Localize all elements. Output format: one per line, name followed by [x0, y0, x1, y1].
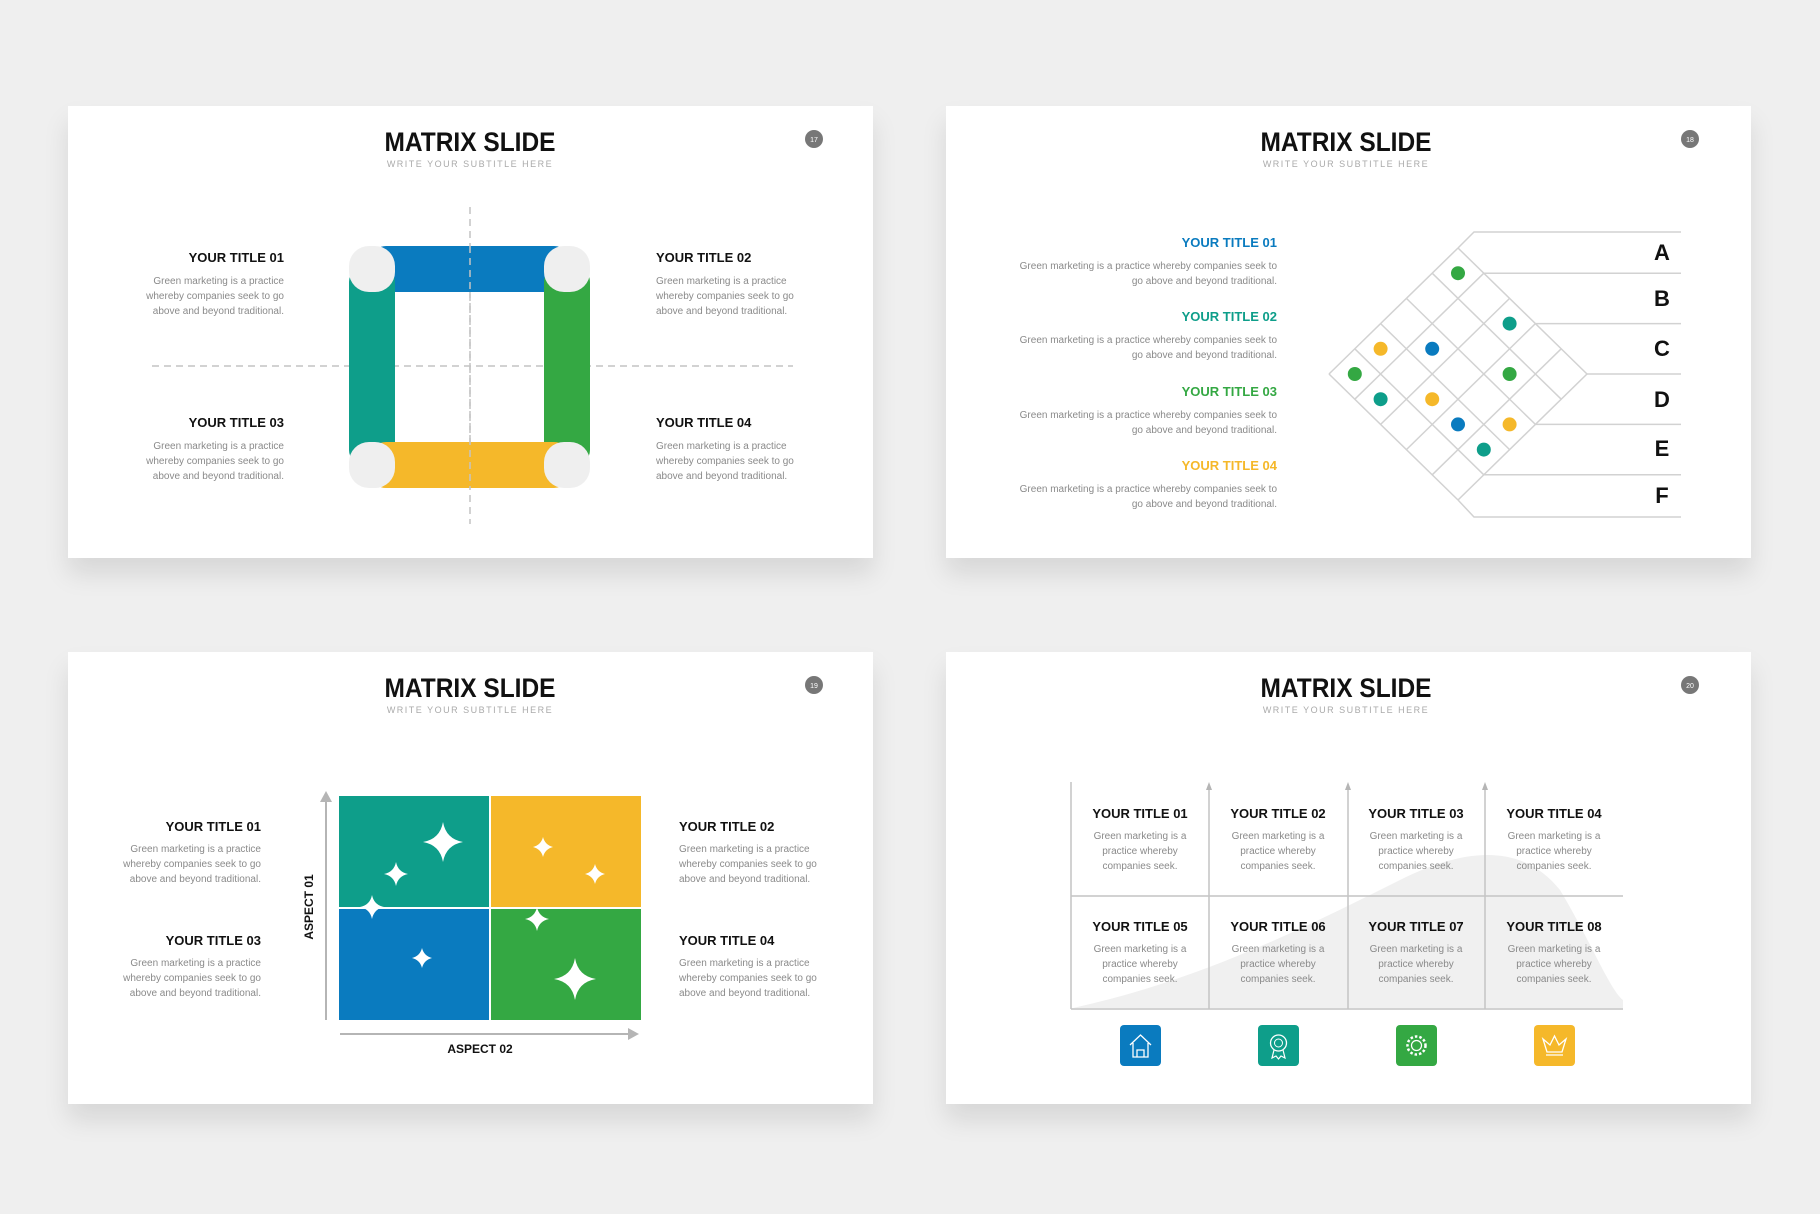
axis labels	[302, 874, 513, 1056]
title	[1260, 127, 1432, 169]
text: left titles: whereby companies seek to go	[122, 973, 261, 984]
cells text: practice whereby	[1378, 959, 1454, 970]
text: title 03: above and beyond traditional.	[153, 471, 284, 482]
text: title 02	[655, 250, 794, 317]
cells text: companies seek.	[1240, 974, 1316, 985]
text: left titles: YOUR TITLE 01	[166, 819, 261, 834]
axis labels: ASPECT 02	[447, 1042, 513, 1056]
text: right titles: above and beyond traditional.	[679, 988, 810, 999]
title	[384, 673, 556, 715]
panel: slide 17 square frame matrix	[68, 106, 873, 558]
text: title 01: whereby companies seek to go	[145, 291, 284, 302]
text: title 01: YOUR TITLE 01	[189, 250, 284, 265]
text list: Green marketing is a practice whereby companies seek to	[1020, 484, 1277, 495]
panel: slide 20 table matrix	[946, 652, 1751, 1104]
text: left titles: Green marketing is a practice	[130, 844, 261, 855]
text list: go above and beyond traditional.	[1132, 276, 1277, 287]
text: left titles	[122, 819, 261, 999]
title: WRITE YOUR SUBTITLE HERE	[1263, 159, 1429, 169]
title: MATRIX SLIDE	[1260, 127, 1432, 157]
text list: YOUR TITLE 04	[1182, 458, 1278, 473]
cells text: YOUR TITLE 04	[1506, 806, 1602, 821]
text list: Green marketing is a practice whereby companies seek to	[1020, 410, 1277, 421]
text: left titles: Green marketing is a practice	[130, 958, 261, 969]
text: title 03: YOUR TITLE 03	[189, 415, 284, 430]
text: title 03: whereby companies seek to go	[145, 456, 284, 467]
row labels A-F: A	[1654, 240, 1670, 265]
quadrants	[339, 796, 641, 1020]
panel: slide 18 diamond grid	[946, 106, 1751, 558]
cells text	[1092, 806, 1602, 985]
text list: go above and beyond traditional.	[1132, 499, 1277, 510]
text list: YOUR TITLE 01	[1182, 235, 1277, 250]
cells text: companies seek.	[1378, 974, 1454, 985]
title	[384, 127, 556, 169]
panel: slide 19 2x2 aspect matrix	[68, 652, 873, 1104]
text: title 01: above and beyond traditional.	[153, 306, 284, 317]
title: WRITE YOUR SUBTITLE HERE	[387, 159, 553, 169]
title: MATRIX SLIDE	[384, 673, 556, 703]
text: right titles: above and beyond traditional.	[679, 874, 810, 885]
text: title 04	[655, 415, 794, 482]
page number	[1681, 130, 1699, 148]
row labels A-F: E	[1655, 436, 1669, 461]
cells text: Green marketing is a	[1232, 831, 1325, 842]
cells text: practice whereby	[1102, 959, 1178, 970]
cells text: Green marketing is a	[1094, 831, 1187, 842]
cells text: Green marketing is a	[1232, 944, 1325, 955]
title	[1260, 673, 1432, 715]
cells text: YOUR TITLE 08	[1506, 919, 1602, 934]
cells text: practice whereby	[1102, 846, 1178, 857]
cells text: Green marketing is a	[1094, 944, 1187, 955]
text list: Green marketing is a practice whereby companies seek to	[1020, 335, 1277, 346]
square frame	[349, 246, 590, 488]
icon: medal	[1258, 1025, 1299, 1066]
page number: 19	[810, 683, 818, 690]
text list: YOUR TITLE 02	[1182, 309, 1277, 324]
icons: sparkles	[360, 822, 605, 1000]
cells text: YOUR TITLE 01	[1092, 806, 1188, 821]
cells text: Green marketing is a	[1508, 944, 1601, 955]
cells text: companies seek.	[1102, 861, 1178, 872]
text: right titles: whereby companies seek to go	[678, 859, 817, 870]
text list: go above and beyond traditional.	[1132, 350, 1277, 361]
page number: 20	[1686, 683, 1694, 690]
text: left titles: above and beyond traditional.	[130, 988, 261, 999]
text: title 04: above and beyond traditional.	[656, 471, 787, 482]
grid lines and arrows	[1071, 782, 1623, 1009]
text: title 03: Green marketing is a practice	[153, 441, 284, 452]
icon: house	[1120, 1025, 1161, 1066]
cells text: practice whereby	[1378, 846, 1454, 857]
text: title 01	[145, 250, 284, 317]
axis labels: ASPECT 01	[302, 874, 316, 940]
text: title 03	[145, 415, 284, 482]
text: title 02: whereby companies seek to go	[655, 291, 794, 302]
text: title 04: whereby companies seek to go	[655, 456, 794, 467]
row labels A-F: C	[1654, 336, 1670, 361]
page number	[1681, 676, 1699, 694]
page number: 17	[810, 137, 818, 144]
page number: 18	[1686, 137, 1694, 144]
text: right titles	[678, 819, 817, 999]
dashed axes	[152, 207, 793, 524]
text: title 04: YOUR TITLE 04	[656, 415, 752, 430]
background curve	[1073, 855, 1623, 1008]
text list	[1020, 235, 1278, 510]
title: WRITE YOUR SUBTITLE HERE	[1263, 705, 1429, 715]
cells text: practice whereby	[1240, 959, 1316, 970]
cells text: YOUR TITLE 03	[1368, 806, 1464, 821]
page number	[805, 676, 823, 694]
icon: gear	[1396, 1025, 1437, 1066]
text list: YOUR TITLE 03	[1182, 384, 1277, 399]
cells text: companies seek.	[1378, 861, 1454, 872]
cells text: companies seek.	[1516, 974, 1592, 985]
cells text: YOUR TITLE 02	[1230, 806, 1326, 821]
text: right titles: YOUR TITLE 04	[679, 933, 775, 948]
cells text: YOUR TITLE 06	[1230, 919, 1326, 934]
row labels A-F: D	[1654, 387, 1670, 412]
cells text: companies seek.	[1102, 974, 1178, 985]
text: title 04: Green marketing is a practice	[656, 441, 787, 452]
cells text: Green marketing is a	[1370, 831, 1463, 842]
title: MATRIX SLIDE	[384, 127, 556, 157]
text: right titles: Green marketing is a practice	[679, 958, 810, 969]
text: right titles: YOUR TITLE 02	[679, 819, 774, 834]
diamond grid chart	[1329, 232, 1681, 517]
cells text: companies seek.	[1516, 861, 1592, 872]
text: left titles: YOUR TITLE 03	[166, 933, 261, 948]
page number	[805, 130, 823, 148]
row labels A-F: B	[1654, 286, 1670, 311]
title: MATRIX SLIDE	[1260, 673, 1432, 703]
text: title 02: above and beyond traditional.	[656, 306, 787, 317]
cells text: practice whereby	[1516, 959, 1592, 970]
text: title 01: Green marketing is a practice	[153, 276, 284, 287]
cells text: Green marketing is a	[1508, 831, 1601, 842]
text: left titles: whereby companies seek to go	[122, 859, 261, 870]
cells text: YOUR TITLE 05	[1092, 919, 1188, 934]
text list: go above and beyond traditional.	[1132, 425, 1277, 436]
row labels A-F: F	[1655, 483, 1669, 508]
text: right titles: Green marketing is a practice	[679, 844, 810, 855]
cells text: companies seek.	[1240, 861, 1316, 872]
icon: crown	[1534, 1025, 1575, 1066]
text: title 02: Green marketing is a practice	[656, 276, 787, 287]
axes	[320, 791, 639, 1040]
cells text: practice whereby	[1516, 846, 1592, 857]
text list: Green marketing is a practice whereby companies seek to	[1020, 261, 1277, 272]
text: title 02: YOUR TITLE 02	[656, 250, 751, 265]
cells text: practice whereby	[1240, 846, 1316, 857]
title: WRITE YOUR SUBTITLE HERE	[387, 705, 553, 715]
text: right titles: whereby companies seek to go	[678, 973, 817, 984]
row labels A-F	[1654, 240, 1670, 508]
cells text: YOUR TITLE 07	[1368, 919, 1464, 934]
cells text: Green marketing is a	[1370, 944, 1463, 955]
text: left titles: above and beyond traditional.	[130, 874, 261, 885]
